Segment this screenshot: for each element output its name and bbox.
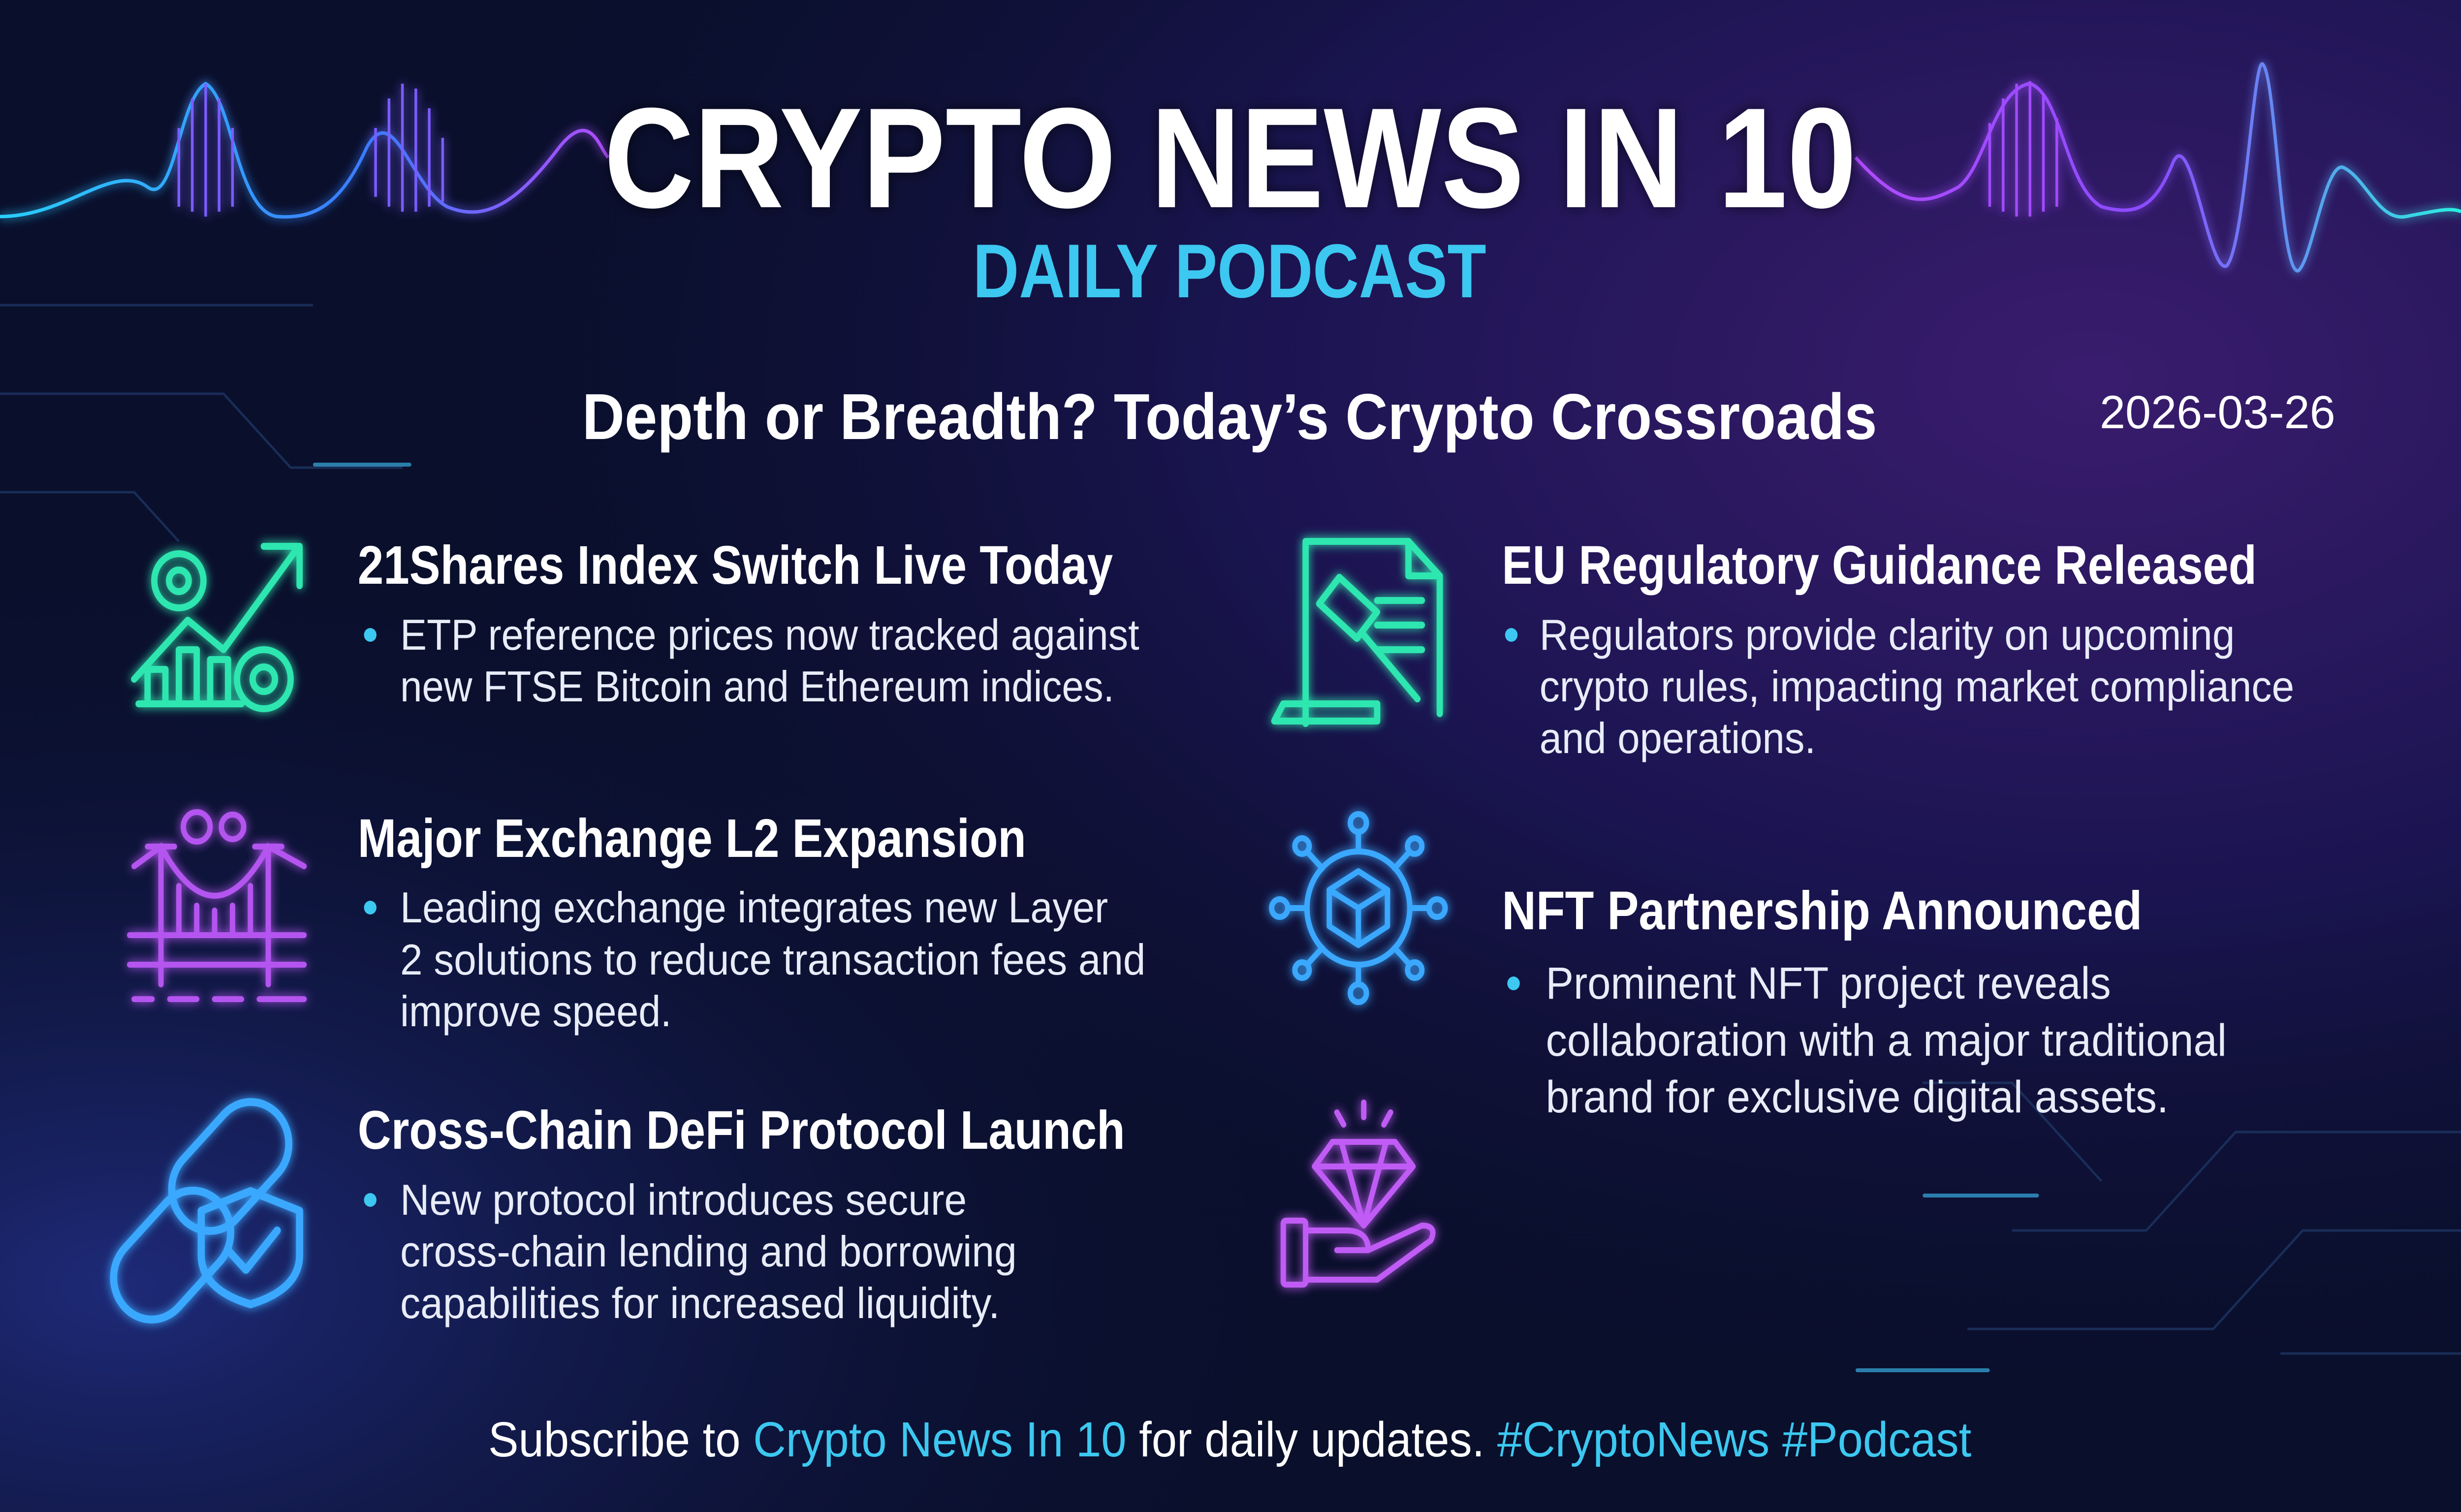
heading: NFT Partnership Announced	[1502, 881, 2142, 941]
waveform right	[1856, 64, 2461, 271]
icon: chain shield	[98, 1085, 305, 1337]
bullet text: capabilities for increased liquidity.	[400, 1279, 1000, 1327]
heading: Major Exchange L2 Expansion	[358, 809, 1026, 869]
heading: Cross-Chain DeFi Protocol Launch	[358, 1101, 1125, 1161]
bullet text	[364, 610, 1139, 711]
bullet text: and operations.	[1540, 714, 1816, 762]
bullet text	[1505, 610, 2294, 762]
episode headline: Depth or Breadth? Today’s Crypto Crossroads	[582, 380, 1877, 453]
title: CRYPTO NEWS IN 10	[604, 78, 1857, 238]
item: 21Shares	[134, 536, 1139, 711]
subtitle: daily podcast: DAILY PODCAST	[973, 229, 1486, 314]
date: 2026-03-26	[2100, 386, 2335, 439]
bullet text: ETP reference prices now tracked against	[400, 610, 1139, 659]
bullet text: new FTSE Bitcoin and Ethereum indices.	[400, 662, 1114, 711]
bullet text: crypto rules, impacting market compliance	[1540, 662, 2294, 711]
bullet text	[364, 1175, 1017, 1327]
bullet text: New protocol introduces secure	[400, 1175, 967, 1224]
item: EU regulatory	[1274, 536, 2294, 762]
bullet text	[364, 883, 1145, 1036]
bullet text: cross-chain lending and borrowing	[400, 1227, 1017, 1276]
bullet text: 2 solutions to reduce transaction fees and	[400, 935, 1145, 984]
icon: diamond hand	[1283, 1102, 1433, 1285]
icon: bridge	[129, 812, 304, 999]
heading: EU Regulatory Guidance Released	[1502, 536, 2257, 596]
waveform left	[0, 84, 608, 217]
footer call to action: Subscribe to Crypto News In 10 for daily updates. #CryptoNews #Podcast	[488, 1413, 1971, 1467]
bullet text: Prominent NFT project reveals	[1546, 957, 2111, 1008]
item: NFT partnership	[1272, 814, 2227, 1285]
bullet text	[1507, 957, 2227, 1122]
item: L2 expansion	[129, 809, 1145, 1036]
bullet text: brand for exclusive digital assets.	[1546, 1071, 2169, 1122]
heading: 21Shares Index Switch Live Today	[358, 536, 1113, 596]
icon: chart gears	[134, 546, 300, 709]
bullet text: Regulators provide clarity on upcoming	[1540, 610, 2235, 659]
bullet text: Leading exchange integrates new Layer	[400, 883, 1108, 932]
icon: document gavel	[1274, 541, 1440, 724]
item: cross-chain DeFi	[98, 1085, 1125, 1337]
icon: network cube	[1272, 814, 1445, 1002]
bullet text: improve speed.	[400, 987, 671, 1036]
bullet text: collaboration with a major traditional	[1546, 1014, 2227, 1066]
